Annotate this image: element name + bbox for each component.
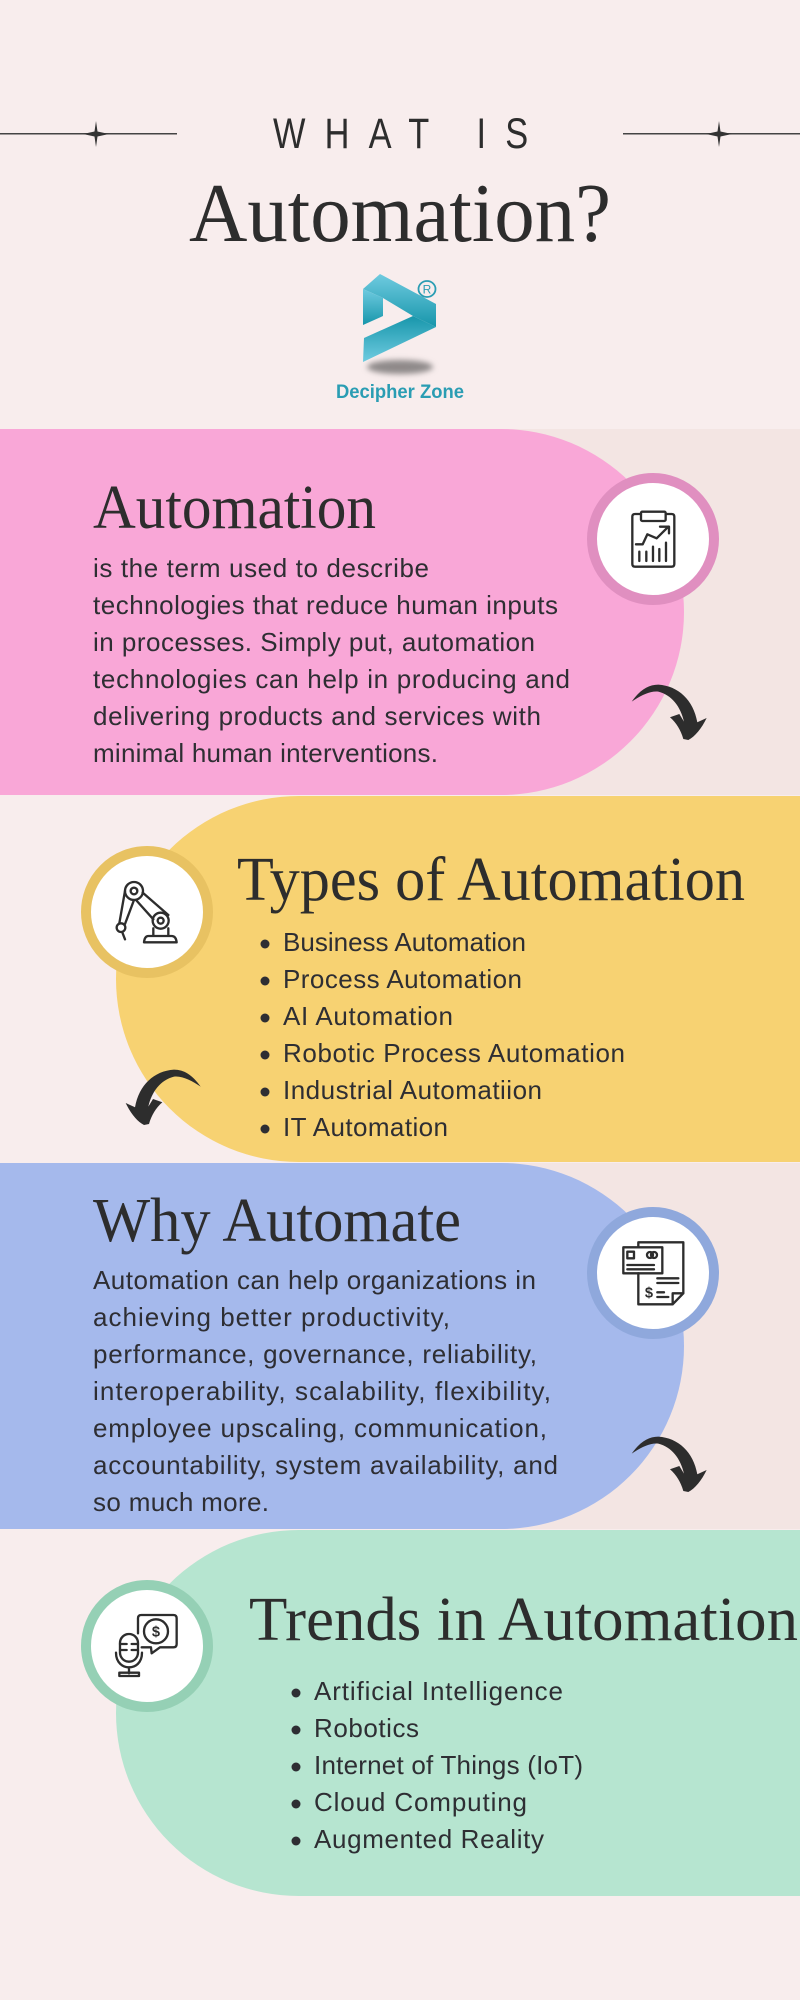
text block: automation definition: technologies that reduce human inputs	[93, 590, 558, 620]
title: what is: WHAT IS	[273, 110, 528, 158]
decorative line with star: right	[623, 121, 800, 147]
text block: automation definition: delivering products and services with	[93, 701, 541, 731]
arrow: to trends	[632, 1437, 707, 1492]
heading: why automate: Why Automate	[93, 1187, 461, 1255]
text block: why automate benefits: interoperability, scalability, flexibility,	[93, 1376, 551, 1406]
logo: Decipher Zone: Decipher Zone	[336, 382, 464, 403]
panel: why automate	[0, 1163, 800, 1529]
text block: why automate benefits: accountability, system availability, and	[93, 1450, 558, 1480]
text block: automation definition: minimal human interventions.	[93, 738, 438, 768]
list: automation types: AI Automation	[283, 1001, 453, 1031]
text block: why automate benefits: Automation can help organizations in	[93, 1265, 536, 1295]
icon: microphone and money speech bubble: $	[152, 1624, 160, 1640]
list: automation types: Business Automation	[283, 927, 526, 957]
list: automation types	[260, 927, 625, 1142]
text block: why automate benefits: achieving better productivity,	[93, 1302, 450, 1332]
text block: automation definition	[93, 553, 570, 768]
title: automation: Automation?	[189, 167, 611, 260]
heading: automation: Automation	[93, 474, 376, 542]
list: automation trends	[292, 1676, 583, 1854]
icon: invoice and card: $	[645, 1286, 653, 1302]
icon: microphone and money speech bubble	[86, 1585, 208, 1707]
text block: why automate benefits: performance, governance, reliability,	[93, 1339, 537, 1369]
list: automation trends: Robotics	[314, 1713, 419, 1743]
heading: trends in automation: Trends in Automation	[249, 1586, 798, 1654]
panel: trends in automation	[86, 1530, 800, 1896]
list: automation trends: Artificial Intelligence	[314, 1676, 563, 1706]
icon: clipboard chart	[592, 478, 714, 600]
arrow: to types	[632, 685, 707, 740]
text block: automation definition: is the term used to describe	[93, 553, 429, 583]
text block: why automate benefits: employee upscaling, communication,	[93, 1413, 547, 1443]
list: automation trends: Internet of Things (IoT)	[314, 1750, 583, 1780]
logo: Decipher Zone	[336, 274, 464, 403]
list: automation types: Robotic Process Automation	[283, 1038, 625, 1068]
text block: why automate benefits: so much more.	[93, 1487, 269, 1517]
arrow: to why automate	[126, 1070, 201, 1125]
panel: types of automation	[86, 796, 800, 1162]
list: automation types: Industrial Automatiion	[283, 1075, 542, 1105]
panel: automation	[0, 429, 800, 795]
heading: types of automation: Types of Automation	[237, 846, 745, 914]
text block: automation definition: in processes. Simply put, automation	[93, 627, 535, 657]
list: automation trends: Augmented Reality	[314, 1824, 544, 1854]
icon: robot arm	[86, 851, 208, 973]
text block: why automate benefits	[93, 1265, 558, 1517]
icon: invoice and card	[592, 1212, 714, 1334]
list: automation types: IT Automation	[283, 1112, 448, 1142]
list: automation types: Process Automation	[283, 964, 522, 994]
decorative line with star: left	[0, 121, 177, 147]
text block: automation definition: technologies can help in producing and	[93, 664, 570, 694]
logo: Decipher Zone: R	[423, 282, 432, 296]
list: automation trends: Cloud Computing	[314, 1787, 527, 1817]
